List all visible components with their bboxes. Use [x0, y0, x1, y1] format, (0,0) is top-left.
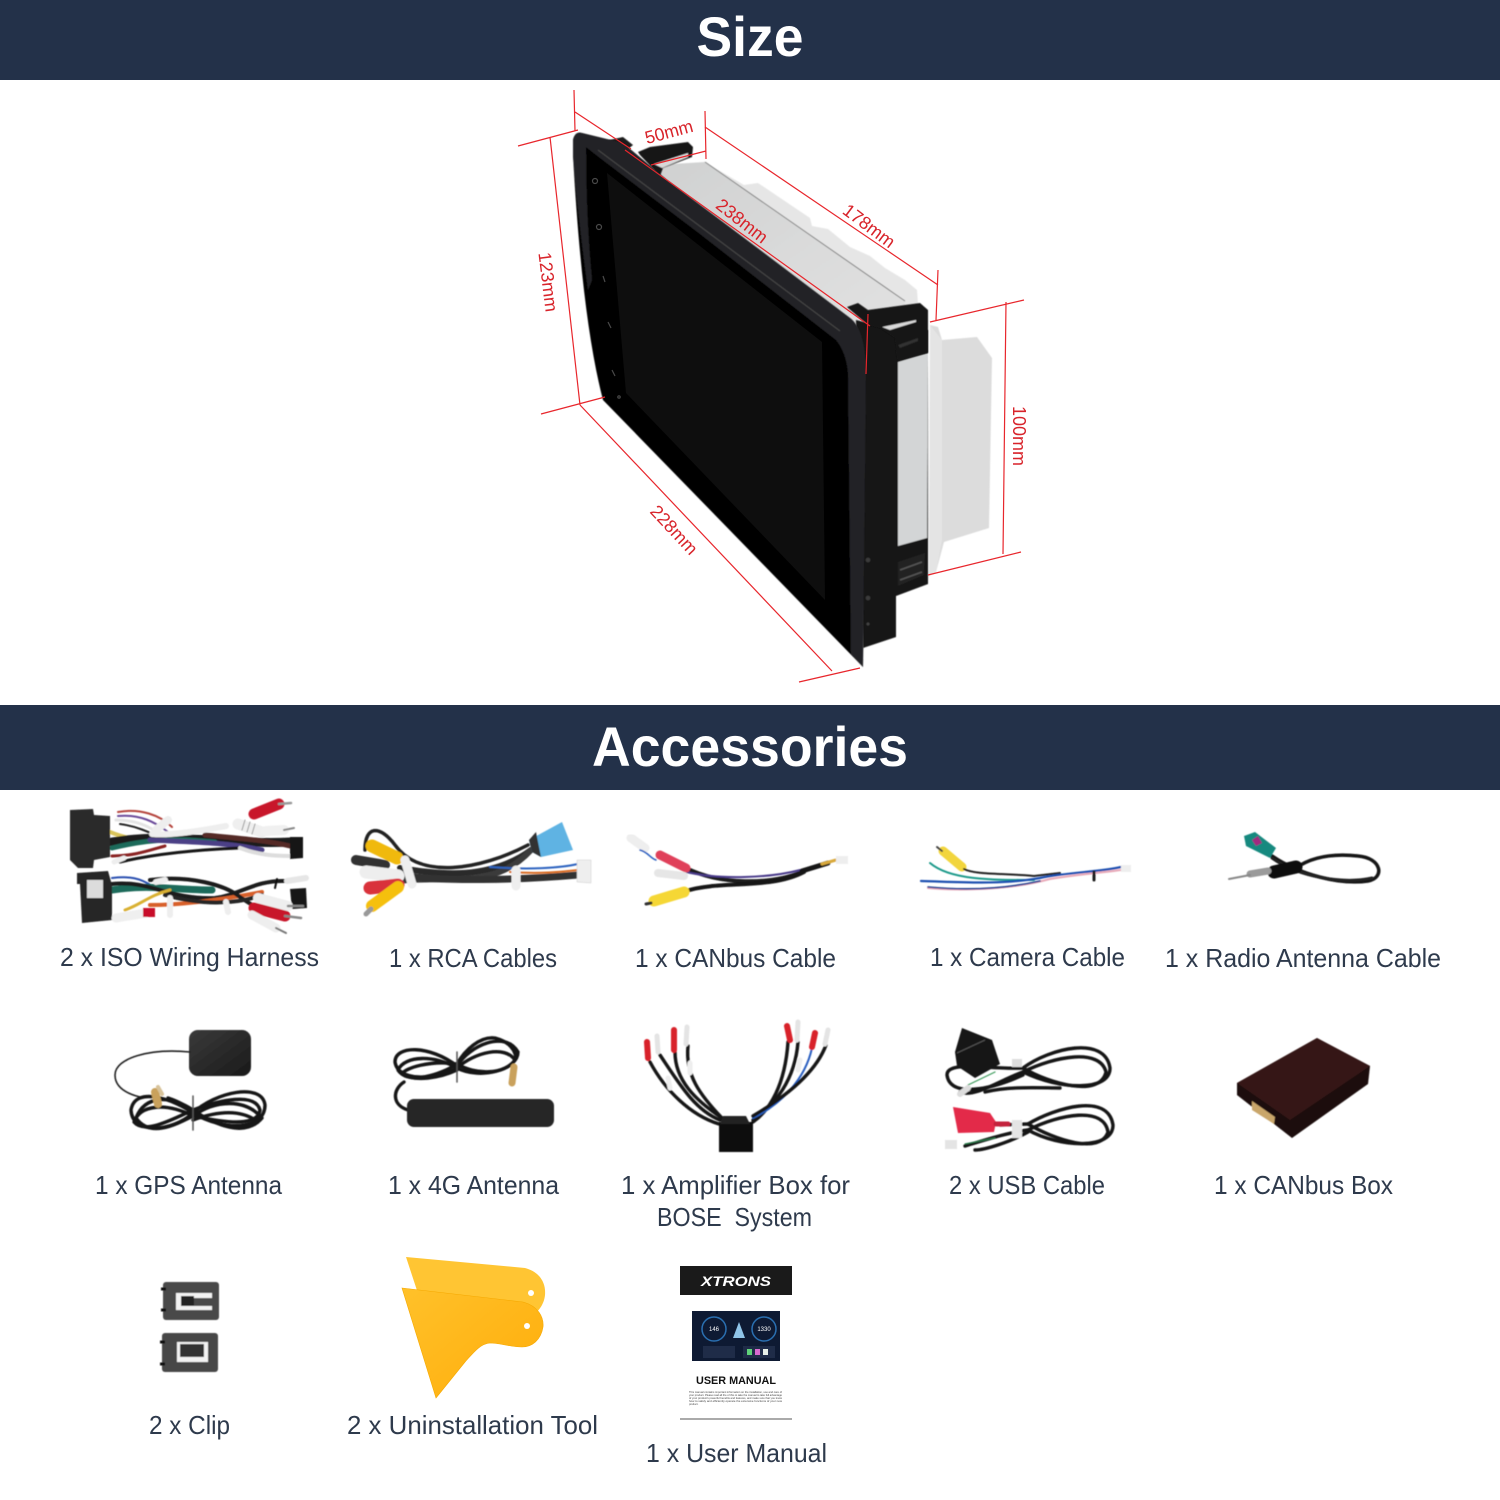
- icon: harness bottom: [77, 871, 307, 933]
- manual screen: [692, 1311, 780, 1361]
- dimension label: 228mm: 228mm: [646, 501, 702, 559]
- device: rear silver chassis: [655, 161, 992, 576]
- device: side panel: [856, 320, 928, 648]
- accessory: clips: [160, 1282, 219, 1372]
- icon: clip 1: [161, 1282, 219, 1320]
- label: 1 x Camera Cable: 1 x Camera Cable: [930, 942, 1125, 972]
- accessory: USB cables: [945, 1028, 1113, 1150]
- manual screen: 1330: [757, 1327, 771, 1333]
- label: 1 x CANbus Cable: 1 x CANbus Cable: [635, 943, 836, 973]
- dimension lines: [518, 90, 1024, 682]
- manual body text: your product. Please read all the of this to take the manual to take full advantage: [689, 1393, 783, 1397]
- dimension label: 50mm: 50mm: [643, 116, 695, 148]
- manual screen: 146: [709, 1327, 720, 1333]
- icon: clip 2: [160, 1333, 218, 1372]
- label: 1 x Amplifier Box for BOSE System: 1 x Amplifier Box for: [621, 1170, 850, 1200]
- manual body text: This manual contains important information on the installation, use and care of: [689, 1390, 782, 1394]
- manual title: USER MANUAL: [696, 1375, 776, 1387]
- icon: tool holes: [524, 1290, 534, 1329]
- label: 2 x ISO Wiring Harness: 2 x ISO Wiring Harness: [60, 942, 319, 972]
- dimension label: 238mm: 238mm: [712, 195, 772, 247]
- accessory: uninstallation tools: [402, 1257, 545, 1398]
- header: Size: Size: [696, 5, 804, 68]
- label: 1 x GPS Antenna: 1 x GPS Antenna: [95, 1170, 283, 1200]
- logo: XTRONS: XTRONS: [700, 1273, 772, 1289]
- label: 1 x Radio Antenna Cable: 1 x Radio Antenna Cable: [1165, 943, 1441, 973]
- accessory: ISO wiring harness: [70, 803, 307, 933]
- manual body text: [689, 1390, 783, 1406]
- label: 1 x User Manual: 1 x User Manual: [646, 1438, 827, 1468]
- accessory: camera cable: [921, 847, 1131, 889]
- label: 2 x Uninstallation Tool: 2 x Uninstallation Tool: [347, 1410, 598, 1440]
- icon: black USB cable: [947, 1028, 1110, 1094]
- device: front bezel: [573, 133, 866, 667]
- manual body text: of your product's powerful benefits and features, and make sure that you know: [689, 1396, 782, 1400]
- accessory: amplifier box for BOSE: [647, 1022, 828, 1152]
- accessory: 4G antenna: [395, 1038, 554, 1127]
- icon: harness top: [70, 803, 303, 868]
- label: 2 x Clip: 2 x Clip: [149, 1410, 230, 1440]
- label: 1 x 4G Antenna: 1 x 4G Antenna: [388, 1170, 560, 1200]
- icon: front tool: [402, 1288, 543, 1398]
- accessory: CANbus cable: [631, 838, 848, 904]
- device: touch buttons: [592, 178, 620, 398]
- accessory: RCA cables: [356, 822, 591, 914]
- accessory: CANbus box: [1237, 1038, 1370, 1138]
- label: 1 x Amplifier Box for BOSE System: BOSE System: [657, 1202, 812, 1232]
- accessory: GPS antenna: [115, 1030, 265, 1130]
- dimension label: 123mm: 123mm: [534, 251, 562, 313]
- label: 2 x USB Cable: 2 x USB Cable: [949, 1170, 1105, 1200]
- label: 1 x CANbus Box: 1 x CANbus Box: [1214, 1170, 1393, 1200]
- label: 1 x Amplifier Box for BOSE System: [621, 1170, 850, 1232]
- header: Accessories: [0, 705, 1500, 790]
- dimension label: 100mm: 100mm: [1009, 406, 1029, 466]
- accessory: user manual: [680, 1266, 792, 1420]
- device: screen: [607, 173, 825, 600]
- icon: red USB cable: [945, 1106, 1113, 1150]
- product diagram: head unit with dimensions: [518, 90, 1029, 682]
- dimension label: 178mm: 178mm: [839, 200, 899, 252]
- header: Accessories: Accessories: [592, 715, 908, 778]
- manual body text: product.: [689, 1402, 699, 1406]
- icon: back tool: [406, 1257, 545, 1330]
- header: Size: [0, 0, 1500, 80]
- accessory: radio antenna cable: [1229, 832, 1379, 882]
- label: 1 x RCA Cables: 1 x RCA Cables: [389, 943, 557, 973]
- device: mounting clips: [600, 137, 928, 361]
- manual body text: how to safely and efficiently operate the extensive functions of your new: [689, 1399, 782, 1403]
